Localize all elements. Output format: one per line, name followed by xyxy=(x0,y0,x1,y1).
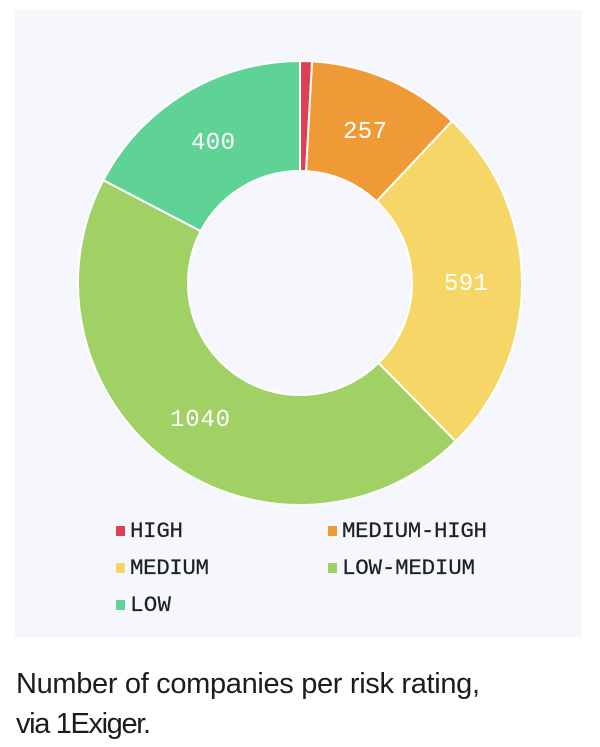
legend item: high: HIGH xyxy=(130,518,183,544)
segment: medium xyxy=(377,121,522,441)
value: low: 400 xyxy=(191,130,235,157)
legend item: medium: MEDIUM xyxy=(130,555,209,581)
segment: high xyxy=(300,61,312,171)
panel: chart background xyxy=(15,10,582,637)
value: medium-high: 257 xyxy=(343,119,387,146)
value labels xyxy=(170,119,488,434)
legend item: low-medium: LOW-MEDIUM xyxy=(342,555,475,581)
caption: via 1Exiger. xyxy=(16,708,151,740)
value: low-medium: 1040 xyxy=(170,407,230,434)
legend item: low: LOW xyxy=(130,592,171,618)
value: medium: 591 xyxy=(444,271,488,298)
segment: medium-high xyxy=(306,61,452,201)
legend xyxy=(116,518,487,618)
donut chart xyxy=(78,61,522,505)
segment: low-medium xyxy=(78,180,456,505)
caption xyxy=(16,668,480,740)
legend item: medium-high: MEDIUM-HIGH xyxy=(342,518,487,544)
caption: Number of companies per risk rating, xyxy=(16,668,480,700)
segment: low xyxy=(103,61,300,231)
